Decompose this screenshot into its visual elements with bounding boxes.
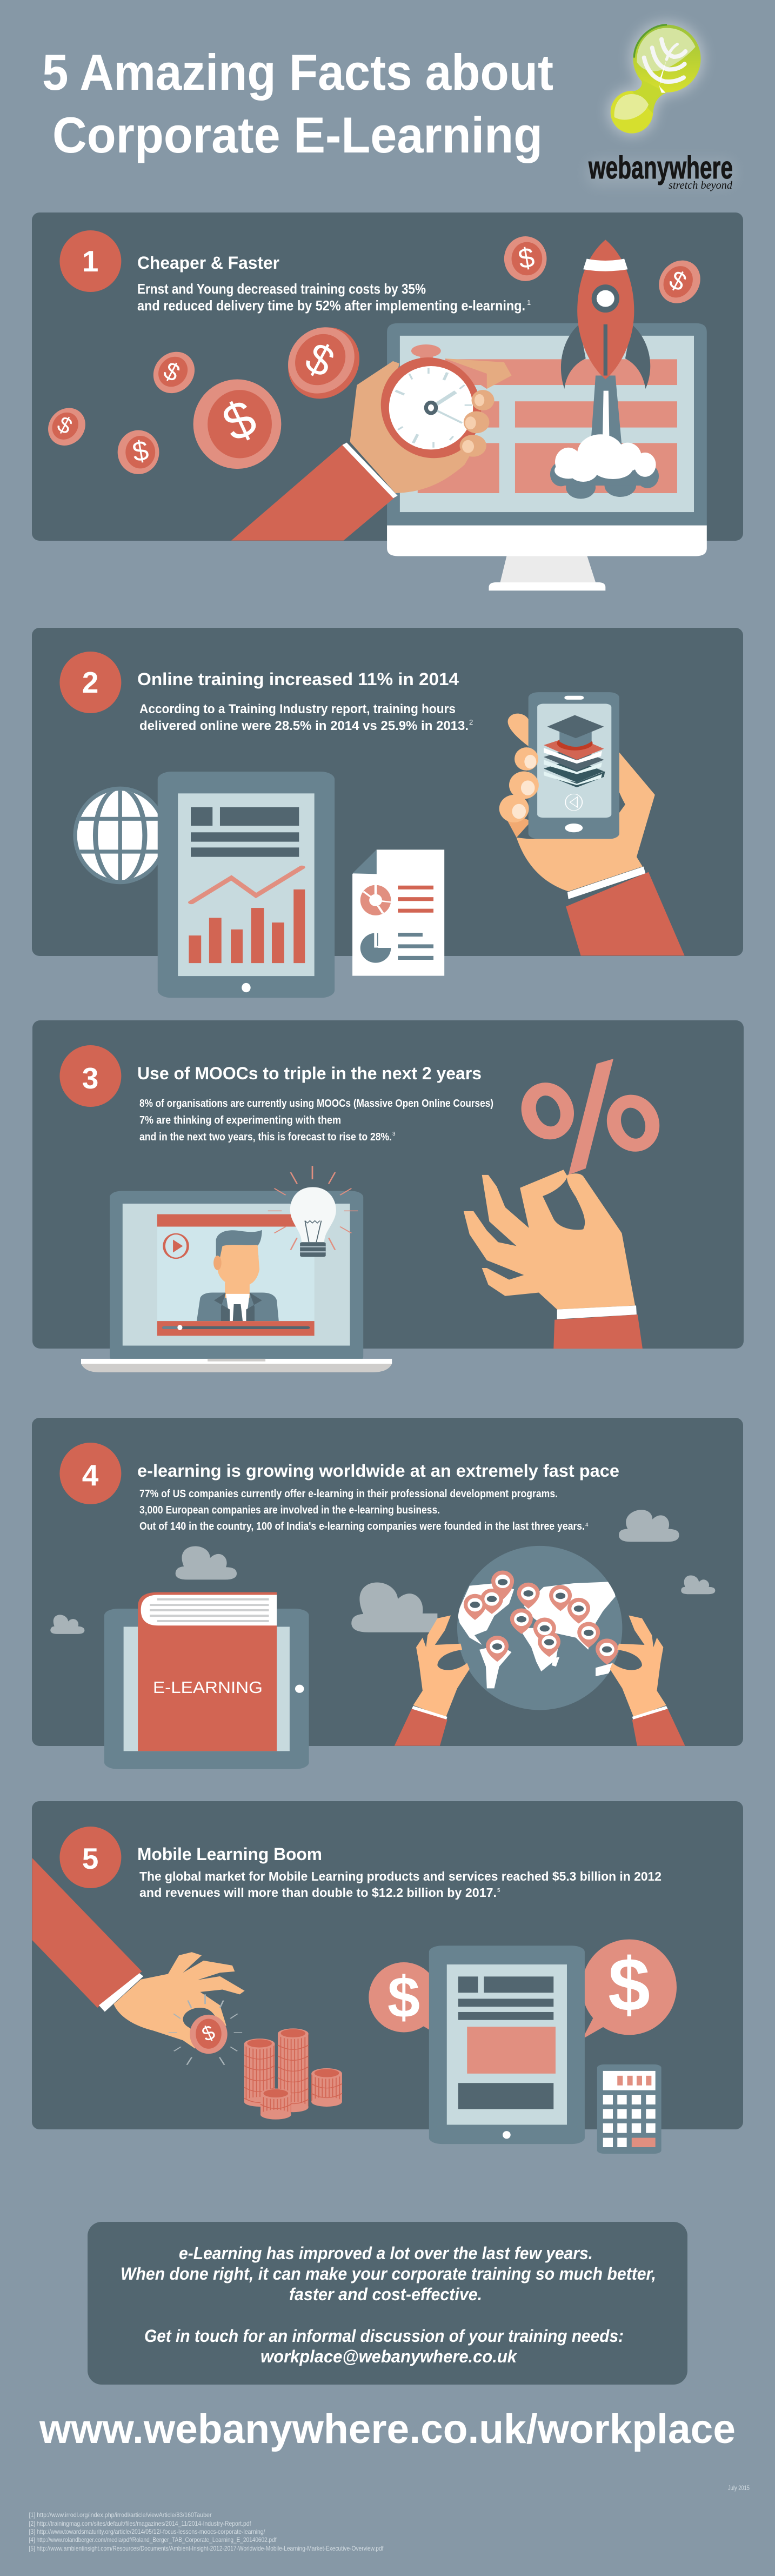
text block 4: 3,000 European companies are involved in the e-learning business. xyxy=(139,1504,440,1516)
number badge 4: 4 xyxy=(82,1458,99,1492)
text block 4: Out of 140 in the country, 100 of India's e-learning companies were founded in the last three years. xyxy=(139,1521,585,1532)
hand holding percent xyxy=(464,1170,643,1349)
callout text: e-Learning has improved a lot over the last few years. xyxy=(179,2243,593,2263)
heading 3: Use of MOOCs to triple in the next 2 years xyxy=(137,1064,482,1083)
callout background xyxy=(88,2222,687,2385)
icon: percent sign xyxy=(519,1059,662,1175)
icon: world globe with pins xyxy=(457,1546,622,1710)
coin dollar signs: $ xyxy=(130,435,151,468)
text block 3: 3 xyxy=(392,1131,396,1137)
number badge 1 xyxy=(59,230,121,292)
icon: tablet with charts xyxy=(158,772,335,998)
dollar signs xyxy=(199,1942,650,2046)
references: [1] http://www.irrodl.org/index.php/irrodl/article/viewArticle/83/160Tauber xyxy=(29,2511,212,2519)
panel: fact 3 xyxy=(32,1020,744,1372)
clouds xyxy=(50,1510,715,1634)
number badge 1: 1 xyxy=(82,244,98,278)
coins xyxy=(44,236,705,474)
text block 2: According to a Training Industry report, training hours xyxy=(139,702,456,716)
panel 2 background xyxy=(32,628,743,956)
text block 1: 1 xyxy=(527,298,531,307)
references: [4] http://www.rolandberger.com/media/pdf/Roland_Berger_TAB_Corporate_Learning_E_20140602.pdf xyxy=(29,2536,277,2544)
dollar signs: $ xyxy=(388,1964,420,2030)
hand dropping coin xyxy=(32,1858,245,2065)
logo: webanywhere xyxy=(586,22,735,191)
text block 1: and reduced delivery time by 52% after implementing e-learning. xyxy=(137,297,525,314)
number badge 4 xyxy=(59,1443,121,1504)
icon: calculator xyxy=(597,2064,662,2154)
references: [3] http://www.towardsmaturity.org/article/2014/05/12/-focus-lessons-moocs-corporate-learning/ xyxy=(29,2528,265,2535)
illustration: hand with coin, stacks, tablet and calculator xyxy=(32,1858,677,2154)
hand holding stopwatch xyxy=(231,344,512,541)
title: 5 Amazing Facts about xyxy=(42,44,553,101)
panel: fact 1 xyxy=(32,213,743,590)
callout text xyxy=(121,2243,656,2366)
panel: fact 2 xyxy=(32,628,743,998)
coin stacks xyxy=(244,2028,342,2120)
panel 4 background xyxy=(32,1418,743,1746)
coin dollar signs: $ xyxy=(665,265,691,297)
illustration: laptop, lightbulb, percent and hand xyxy=(81,1059,662,1372)
references xyxy=(29,2511,384,2552)
title xyxy=(42,44,553,163)
speech bubbles xyxy=(369,1940,677,2039)
coin dollar signs: $ xyxy=(159,356,185,387)
icon: monitor xyxy=(387,323,707,590)
number badge 5: 5 xyxy=(82,1842,98,1875)
text block 2: delivered online were 28.5% in 2014 vs 25.9% in 2013. xyxy=(139,719,469,733)
book label: E-LEARNING xyxy=(153,1678,263,1697)
icon: globe xyxy=(73,786,158,885)
heading 1: Cheaper & Faster xyxy=(137,253,279,273)
number badge 5 xyxy=(59,1827,121,1888)
icon: tablet with book xyxy=(104,1592,309,1769)
text block 1 xyxy=(137,281,531,314)
text block 5 xyxy=(139,1869,662,1900)
text block 3: 8% of organisations are currently using MOOCs (Massive Open Online Courses) xyxy=(139,1098,493,1110)
coin dollar signs: $ xyxy=(298,333,342,387)
number badge 3 xyxy=(59,1045,121,1107)
coin dollar signs: $ xyxy=(516,242,537,275)
text block 2 xyxy=(139,702,473,733)
illustration: tablet book, clouds and globe xyxy=(50,1510,715,1769)
text block 3: 7% are thinking of experimenting with them xyxy=(139,1114,341,1126)
heading 4: e-learning is growing worldwide at an extremely fast pace xyxy=(137,1461,619,1480)
number badge 2 xyxy=(59,652,121,713)
icon: report document xyxy=(352,849,444,976)
icon: lightbulb xyxy=(268,1166,358,1257)
text block 5: The global market for Mobile Learning products and services reached $5.3 billion in 2012 xyxy=(139,1869,662,1883)
right hand xyxy=(610,1616,685,1746)
callout text: faster and cost-effective. xyxy=(289,2285,482,2304)
text block 5: 5 xyxy=(497,1888,500,1894)
heading 2: Online training increased 11% in 2014 xyxy=(137,669,459,689)
icon: laptop with video xyxy=(81,1191,392,1372)
text block 3: and in the next two years, this is forecast to rise to 28%. xyxy=(139,1131,392,1143)
text block 2: 2 xyxy=(469,718,473,726)
panel: fact 4 xyxy=(32,1418,743,1769)
panel: fact 5 xyxy=(32,1801,743,2154)
text block 5: and revenues will more than double to $12.2 billion by 2017. xyxy=(139,1885,497,1900)
panel 5 background xyxy=(32,1801,743,2129)
text block 3 xyxy=(139,1098,493,1143)
logo: webanywhere: stretch beyond xyxy=(669,180,733,191)
text block 4 xyxy=(139,1488,589,1532)
hand holding phone xyxy=(499,692,685,955)
callout: closing message xyxy=(88,2222,687,2385)
dollar signs: $ xyxy=(199,2021,218,2046)
illustration: globe, tablet, document and phone xyxy=(73,692,685,998)
references: [2] http://trainingmag.com/sites/default/files/magazines/2014_11/2014-Industry-Report.pdf xyxy=(29,2520,251,2527)
heading 5: Mobile Learning Boom xyxy=(137,1844,322,1864)
icon: tablet xyxy=(429,1946,585,2144)
coin dollar signs: $ xyxy=(54,411,76,439)
text block 4: 4 xyxy=(585,1522,589,1528)
number badge 2: 2 xyxy=(82,666,98,699)
text block 4: 77% of US companies currently offer e-learning in their professional development programs. xyxy=(139,1488,558,1500)
date: July 2015 xyxy=(728,2484,750,2492)
illustration: monitor, rocket, coins and stopwatch hand xyxy=(44,236,707,590)
left hand xyxy=(395,1616,470,1746)
callout text: workplace@webanywhere.co.uk xyxy=(260,2347,518,2366)
references: [5] http://www.ambientinsight.com/Resources/Documents/Ambient-Insight-2012-2017-Worldwide-Mobile-Learning-Market-Executive-Overview.pdf xyxy=(29,2545,384,2552)
title: Corporate E-Learning xyxy=(52,107,543,163)
callout text: Get in touch for an informal discussion of your training needs: xyxy=(144,2326,624,2346)
callout text: When done right, it can make your corporate training so much better, xyxy=(121,2264,656,2283)
number badge 3: 3 xyxy=(82,1061,98,1095)
dollar signs: $ xyxy=(608,1942,650,2027)
panel 1 background xyxy=(32,213,743,541)
text block 1: Ernst and Young decreased training costs by 35% xyxy=(137,281,426,297)
icon: rocket xyxy=(550,240,659,499)
coin dollar signs: $ xyxy=(214,388,265,453)
panel 3 background xyxy=(32,1020,744,1349)
website url: www.webanywhere.co.uk/workplace xyxy=(39,2406,736,2452)
coin dollar signs xyxy=(54,242,691,468)
